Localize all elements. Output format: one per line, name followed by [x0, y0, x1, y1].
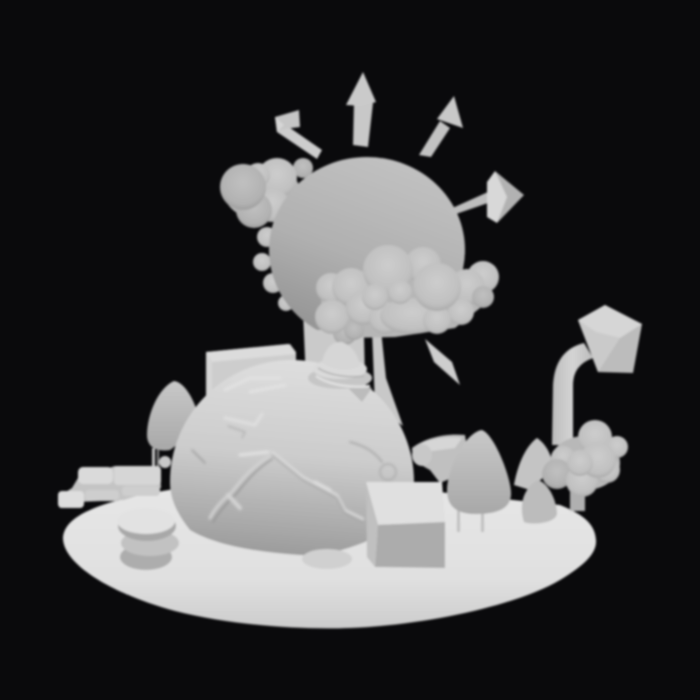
globe: [159, 360, 414, 555]
oval slab behind right tree: [412, 435, 470, 483]
left tree: [147, 381, 196, 468]
back wall block: [206, 344, 296, 410]
base platform disc: [63, 488, 596, 628]
small cabin box: [366, 482, 445, 568]
arrow: lower fragment: [425, 339, 460, 385]
small puddle ellipse on base: [302, 549, 352, 569]
sun support columns: [303, 312, 403, 426]
layered stack on top of globe: [308, 342, 372, 402]
left cloud behind sun: [220, 158, 313, 311]
large centre-right tree: [447, 430, 511, 532]
far right tree: [514, 438, 553, 490]
lamp post with shade: [552, 305, 642, 445]
stacked stones at left edge: [58, 466, 161, 508]
arrow: upper left: [275, 110, 322, 159]
arrow: upper right: [419, 96, 463, 157]
main cloud in front of sun: [315, 245, 499, 345]
small tree: [522, 480, 557, 523]
stacked discs on base: [117, 508, 179, 570]
scene: [58, 72, 642, 628]
arrow: top: [346, 72, 376, 147]
sun sphere: [269, 157, 465, 343]
arrow: right: [448, 171, 524, 223]
3D scene illustration: [56, 71, 644, 630]
sun ray arrows: [275, 72, 524, 385]
globe continents: [192, 378, 396, 522]
right bush: [542, 420, 628, 511]
